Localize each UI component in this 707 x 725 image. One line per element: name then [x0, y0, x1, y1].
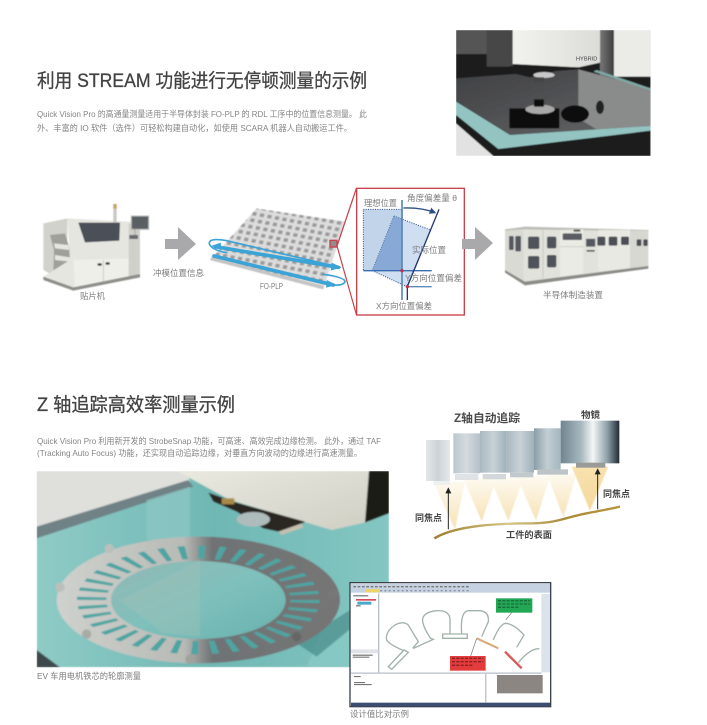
red result box	[450, 656, 486, 671]
labels: deviation annotations: 实际位置	[412, 245, 446, 255]
actual position square	[372, 216, 431, 287]
selected die marker	[330, 240, 337, 247]
title: STREAM example: 利用 STREAM 功能进行无停顿测量的示例	[37, 70, 367, 92]
arrow: FO-PLP to equipment	[462, 227, 493, 260]
label: chip mounter: 贴片机	[80, 291, 105, 301]
label: FO-PLP: FO-PLP	[260, 281, 283, 291]
text block: STREAM description	[37, 109, 367, 133]
scan path arrows	[209, 240, 345, 285]
green result box	[496, 598, 532, 613]
workpiece surface	[434, 507, 620, 538]
caption: design value comparison: 设计值比对示例	[350, 709, 409, 719]
machine: semiconductor equipment	[505, 227, 648, 285]
labels: deviation annotations: 理想位置	[364, 198, 397, 208]
screenshot: design value comparison software	[350, 583, 551, 707]
stator core ring	[57, 537, 340, 663]
labels: Z-axis diagram: 物镜	[581, 409, 600, 420]
focus height arrows	[448, 469, 598, 529]
labels: Z-axis diagram: Z轴自动追踪	[454, 411, 521, 425]
contour drawing	[386, 611, 539, 669]
title: Z-axis tracking example: Z 轴追踪高效率测量示例	[37, 394, 235, 416]
labels: deviation annotations: 角度偏差量 θ	[407, 193, 457, 203]
label: die position information: 冲模位置信息	[153, 268, 204, 278]
labels: Z-axis diagram	[415, 409, 630, 540]
focus cones	[433, 467, 608, 529]
photo: measuring head over glass stage	[456, 30, 651, 156]
diagram: Z-axis auto tracking	[426, 421, 620, 538]
objective lens positions	[426, 421, 619, 485]
label: semiconductor equipment: 半导体制造装置	[543, 290, 603, 300]
labels: Z-axis diagram: 工件的表面	[506, 529, 552, 540]
text block: Z-axis description	[37, 436, 381, 458]
labels: deviation annotations	[364, 193, 462, 311]
machine: chip mounter	[43, 204, 149, 291]
photo: EV motor core measurement	[37, 471, 389, 667]
labels: Z-axis diagram: 同焦点	[603, 488, 630, 499]
ideal position square	[363, 209, 402, 271]
panel: position deviation detail	[357, 188, 464, 315]
lower panels	[351, 672, 550, 706]
reference axes	[399, 200, 404, 300]
FO-PLP panel with scan paths	[209, 208, 345, 289]
text block: STREAM description: Quick Vision Pro 的高通量测量适用于半导体封装 FO-PLP 的 RDL 工序中的位置信息测量。 此	[37, 109, 367, 119]
brand mark: HYBRID	[576, 57, 597, 63]
arrow: mounter to FO-PLP	[165, 227, 196, 260]
zoom lines to detail panel	[337, 188, 356, 315]
labels: Z-axis diagram: 同焦点	[415, 512, 442, 523]
tree panel	[351, 593, 379, 673]
text block: STREAM description: 外、丰富的 IO 软件（选件）可轻松构建自动化，如使用 SCARA 机器人自动搬运工件。	[37, 123, 352, 133]
caption: EV motor core: EV 车用电机铁芯的轮廓测量	[37, 671, 141, 681]
labels: deviation annotations: Y方向位置偏差	[405, 273, 462, 283]
text block: Z-axis description: (Tracking Auto Focus) 功能，还实现自动追踪边缘，对垂直方向波动的边缘进行高速测量。	[37, 448, 362, 458]
text block: Z-axis description: Quick Vision Pro 利用新开发的 StrobeSnap 功能，可高速、高效完成边缘检测。 此外，通过 TAF	[37, 436, 381, 446]
labels: deviation annotations: X方向位置偏差	[376, 301, 432, 311]
toolbar	[351, 584, 550, 672]
